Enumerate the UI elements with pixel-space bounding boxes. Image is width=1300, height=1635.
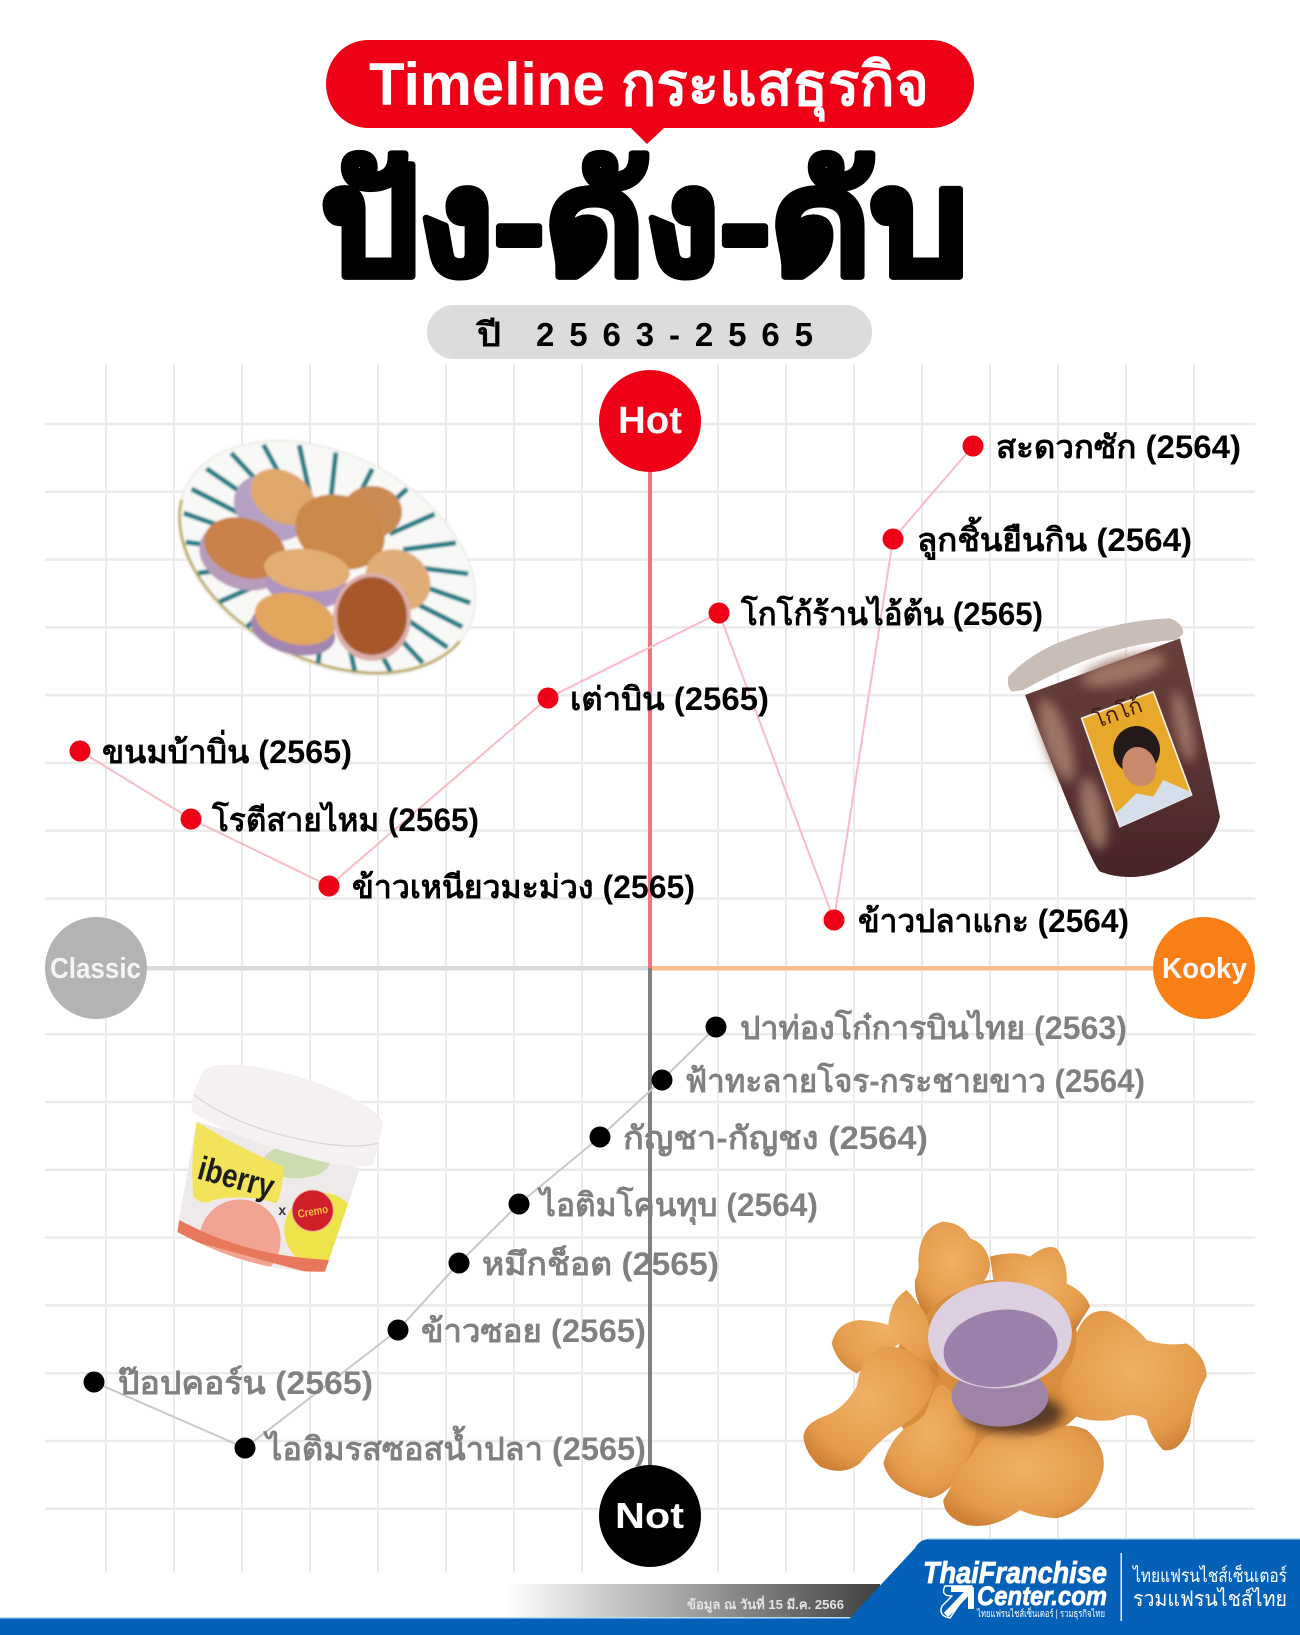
icon: iberry cup: x bbox=[278, 1202, 286, 1218]
footer band bbox=[0, 1617, 1300, 1635]
not item: fa thalai chon: ฟ้าทะลายโจร-กระชายขาว (2564) bbox=[685, 1062, 1145, 1099]
badge: not bbox=[599, 1465, 701, 1567]
year pill bbox=[427, 305, 872, 359]
not item: khao soi: ข้าวซอย (2565) bbox=[421, 1313, 646, 1349]
hot item: khao pla kae: ข้าวปลาแกะ (2564) bbox=[858, 903, 1129, 939]
not item: ice cream cone: ไอติมโคนทุบ (2564) bbox=[537, 1186, 818, 1226]
footer source strip: ข้อมูล ณ วันที่ 15 มี.ค. 2566 bbox=[687, 1595, 844, 1613]
icon: cocoa cup bbox=[1008, 618, 1220, 877]
footer logo panel: รวมแฟรนไชส์ไทย bbox=[1133, 1587, 1287, 1611]
icon: patongko with dip bbox=[803, 1222, 1207, 1526]
axis: horizontal kooky bbox=[652, 966, 1157, 970]
hot item: khanom ba bin: ขนมบ้าบิ่น (2565) bbox=[102, 729, 352, 770]
icon: iberry cup bbox=[177, 1065, 383, 1281]
year pill: ปี bbox=[476, 316, 501, 353]
footer logo panel bbox=[846, 1538, 1300, 1635]
badge: kooky: Kooky bbox=[1162, 953, 1247, 985]
hot item: luk chin: ลูกชิ้นยืนกิน (2564) bbox=[917, 516, 1192, 561]
label sticker bbox=[1082, 692, 1192, 827]
badge: kooky bbox=[1153, 917, 1255, 1019]
title pill bbox=[326, 40, 974, 144]
hot item: sadaeng sak: สะดวกซัก (2564) bbox=[996, 429, 1241, 465]
icon: iberry cup: Cremo bbox=[297, 1204, 329, 1221]
badge: hot: Hot bbox=[618, 400, 682, 442]
year pill: 2563-2565 bbox=[536, 316, 813, 353]
footer logo panel: ไทยแฟรนไชส์เซ็นเตอร์ | รวมธุรกิจไทย bbox=[976, 1606, 1105, 1620]
connector: not trend bbox=[94, 1027, 716, 1448]
axis: vertical not bbox=[648, 968, 652, 1468]
badge: hot bbox=[599, 370, 701, 472]
footer logo panel: ThaiFranchise bbox=[923, 1555, 1107, 1590]
hot item: mango sticky rice: ข้าวเหนียวมะม่วง (2565) bbox=[352, 869, 695, 905]
axis: vertical hot bbox=[648, 470, 652, 968]
badge: classic: Classic bbox=[50, 953, 141, 985]
badge: classic bbox=[45, 917, 147, 1019]
axis: horizontal classic bbox=[145, 966, 648, 970]
not item: cannabis: กัญชา-กัญชง (2564) bbox=[623, 1120, 928, 1157]
main heading: ปัง-ดัง-ดับ bbox=[321, 141, 968, 306]
connector: hot trend bbox=[80, 446, 973, 920]
hot item: luk chin bbox=[882, 516, 1192, 561]
footer logo panel: Center.com bbox=[977, 1581, 1107, 1611]
hot item: cocoa: โกโก้ร้านไอ้ต้น (2565) bbox=[740, 595, 1043, 632]
not item: popcorn: ป๊อปคอร์น (2565) bbox=[118, 1365, 373, 1401]
hot item: roti: โรตีสายไหม (2565) bbox=[211, 801, 479, 838]
hot item: tao bin: เต่าบิน (2565) bbox=[570, 681, 769, 717]
badge: not: Not bbox=[615, 1495, 684, 1536]
footer source strip bbox=[506, 1584, 880, 1618]
icon: plate of pancakes bbox=[139, 394, 515, 722]
not item: fish sauce ice cream: ไอติมรสซอสน้ำปลา (2565) bbox=[263, 1425, 646, 1467]
title pill: Timeline กระแสธุรกิจ bbox=[369, 51, 929, 122]
label sticker: โกโก้ bbox=[1090, 692, 1146, 733]
icon: iberry cup: iberry bbox=[194, 1150, 279, 1206]
not item: squid shot: หมึกช็อต (2565) bbox=[482, 1244, 719, 1282]
not item: patongko: ปาท่องโก๋การบินไทย (2563) bbox=[740, 1009, 1127, 1046]
icon: logo arrow bbox=[941, 1586, 972, 1618]
